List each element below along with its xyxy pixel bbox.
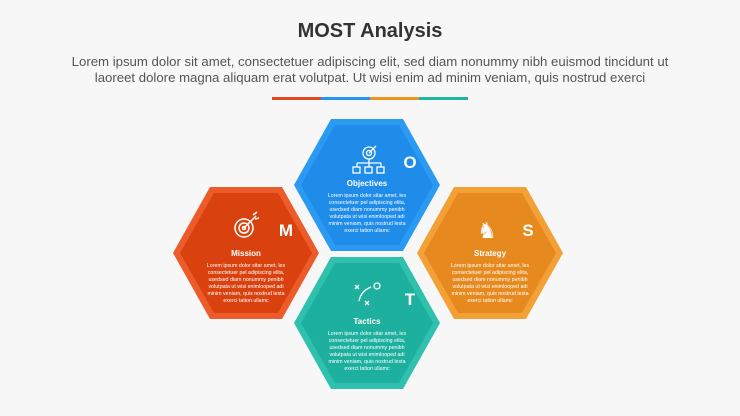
panel: strategy: consectetuer pel adipiscing elita, xyxy=(452,270,528,276)
panel: objectives: minim veniam, quis nostrud lesta xyxy=(328,221,406,227)
panel: objectives: Lorem ipsum dolor sitar amet, les xyxy=(328,193,407,199)
panel: mission: exerci tation ullamc xyxy=(223,298,269,304)
panel: mission: volutpata ut wisi enimlooped adi xyxy=(208,284,284,290)
divider line xyxy=(272,97,468,100)
panel: strategy: usedsed diam nonummy penibh xyxy=(452,277,528,283)
panel: strategy: exerci tation ullamc xyxy=(467,298,513,304)
panel: strategy: volutpata ut wisi enimlooped adi xyxy=(452,284,528,290)
panel: tactics: exerci tation ullamc xyxy=(344,366,390,372)
panel: tactics: consectetuer pel adipiscing elita, xyxy=(329,338,405,344)
panel: objectives: Objectives xyxy=(347,179,388,188)
icon: target xyxy=(235,212,259,237)
panel: mission: usedsed diam nonummy penibh xyxy=(208,277,284,283)
panel: tactics: volutpata ut wisi enimlooped adi xyxy=(329,352,405,358)
title: MOST Analysis xyxy=(298,20,442,42)
panel: strategy: minim veniam, quis nostrud lesta xyxy=(451,291,529,297)
panel: mission: minim veniam, quis nostrud lesta xyxy=(207,291,285,297)
panel: objectives xyxy=(294,119,440,251)
icon: chess knight: ♞ xyxy=(477,219,497,244)
icon: target hierarchy xyxy=(353,146,384,173)
panel: objectives: consectetuer pel adipiscing elita, xyxy=(329,200,405,206)
panel: tactics: Lorem ipsum dolor sitar amet, les xyxy=(328,331,407,337)
panel: strategy: Strategy xyxy=(474,249,507,258)
subtitle: Lorem ipsum dolor sit amet, consectetuer adipiscing elit, sed diam nonummy nibh euismod tincidunt ut xyxy=(72,54,668,69)
panel: tactics: usedsed diam nonummy penibh xyxy=(329,345,405,351)
letter M: M xyxy=(279,221,293,240)
panel: objectives: usedsed diam nonummy penibh xyxy=(329,207,405,213)
panel: mission: Lorem ipsum dolor sitar amet, les xyxy=(207,263,286,269)
subtitle: laoreet dolore magna aliquam erat volutpat. Ut wisi enim ad minim veniam, quis nostrud exerci xyxy=(95,70,645,85)
panel: tactics xyxy=(294,257,440,389)
panel: objectives: exerci tation ullamc xyxy=(344,228,390,234)
letter T: T xyxy=(405,290,416,309)
panel: objectives: volutpata ut wisi enimlooped adi xyxy=(329,214,405,220)
subtitle xyxy=(72,54,668,85)
panel: tactics: Tactics xyxy=(354,317,381,326)
panel: mission: Mission xyxy=(231,249,261,258)
letter S: S xyxy=(522,221,534,240)
icon: tactics play xyxy=(355,283,380,305)
panel: mission xyxy=(173,187,319,319)
letter O: O xyxy=(403,153,417,172)
panel: tactics: minim veniam, quis nostrud lesta xyxy=(328,359,406,365)
panel: strategy: Lorem ipsum dolor sitar amet, les xyxy=(451,263,530,269)
panel: mission: consectetuer pel adipiscing elita, xyxy=(208,270,284,276)
panel: strategy xyxy=(417,187,563,319)
